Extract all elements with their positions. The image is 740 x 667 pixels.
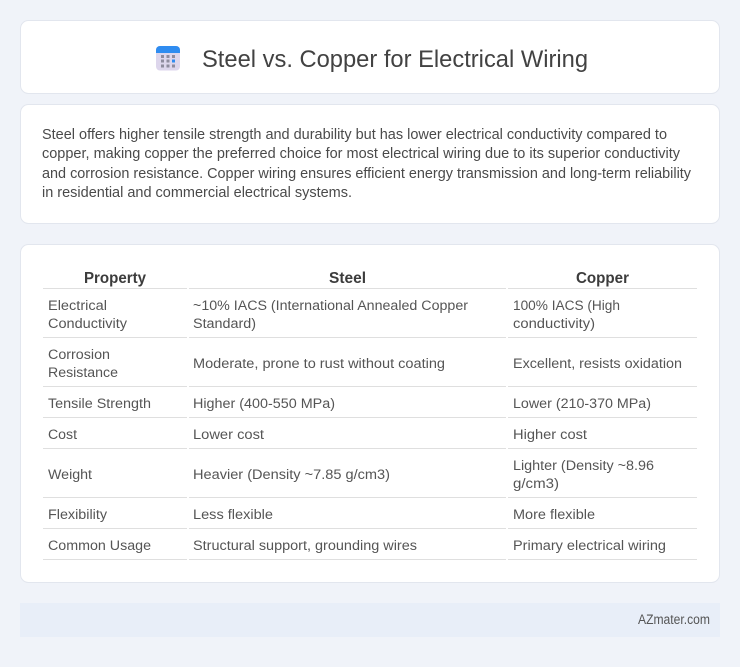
row: flexibility: More flexible	[513, 507, 595, 523]
row: flexibility: Less flexible	[193, 507, 273, 523]
row: weight: Weight	[48, 467, 92, 483]
intro text: and corrosion resistance. Copper wiring ensures efficient energy transmission and long-term reliability	[42, 166, 692, 182]
row: electrical conductivity	[48, 298, 620, 332]
intro text: Steel offers higher tensile strength and durability but has lower electrical conductivity compared to	[42, 127, 667, 143]
row: tensile strength: Tensile Strength	[48, 396, 151, 412]
footer bar	[20, 603, 720, 637]
row: electrical conductivity: Conductivity	[48, 316, 128, 332]
row: flexibility: Flexibility	[48, 507, 108, 523]
row: corrosion resistance	[48, 347, 682, 381]
row: weight: g/cm3)	[513, 476, 559, 492]
header panel	[20, 20, 720, 94]
row: corrosion resistance: Corrosion	[48, 347, 110, 363]
row: tensile strength: Lower (210-370 MPa)	[513, 396, 651, 412]
title: Steel vs. Copper for Electrical Wiring	[202, 46, 588, 73]
icon: calendar	[156, 46, 180, 70]
row: electrical conductivity: Electrical	[48, 298, 107, 314]
row: electrical conductivity: Standard)	[193, 316, 256, 332]
row: cost: Higher cost	[513, 427, 587, 443]
row: electrical conductivity: ~10% IACS (International Annealed Copper	[193, 298, 468, 314]
table panel	[20, 244, 720, 582]
intro panel	[20, 104, 720, 224]
table header row: Property	[84, 270, 146, 287]
row: flexibility	[48, 507, 595, 523]
table header row	[84, 270, 629, 287]
row: common usage: Common Usage	[48, 538, 151, 554]
row: weight: Lighter (Density ~8.96	[513, 458, 654, 474]
row: corrosion resistance: Moderate, prone to rust without coating	[193, 356, 445, 372]
row: common usage: Structural support, grounding wires	[193, 538, 417, 554]
row: common usage: Primary electrical wiring	[513, 538, 666, 554]
row: weight	[48, 458, 654, 492]
intro text: copper, making copper the preferred choice for most electrical wiring due to its superior conductivity	[42, 146, 681, 162]
row: corrosion resistance: Resistance	[48, 365, 118, 381]
intro text	[42, 127, 692, 201]
row: tensile strength	[48, 396, 651, 412]
intro text: in residential and commercial electrical systems.	[42, 185, 352, 201]
row: cost: Lower cost	[193, 427, 264, 443]
footer credit: AZmater.com	[638, 612, 710, 627]
row: corrosion resistance: Excellent, resists oxidation	[513, 356, 682, 372]
row: common usage	[48, 538, 666, 554]
table header row: Steel	[329, 270, 366, 287]
table header row: Copper	[576, 270, 629, 287]
row: cost	[48, 427, 587, 443]
row: tensile strength: Higher (400-550 MPa)	[193, 396, 335, 412]
row: electrical conductivity: conductivity)	[513, 316, 595, 332]
row: electrical conductivity: 100% IACS (High	[513, 298, 620, 314]
row: weight: Heavier (Density ~7.85 g/cm3)	[193, 467, 390, 483]
row: cost: Cost	[48, 427, 77, 443]
